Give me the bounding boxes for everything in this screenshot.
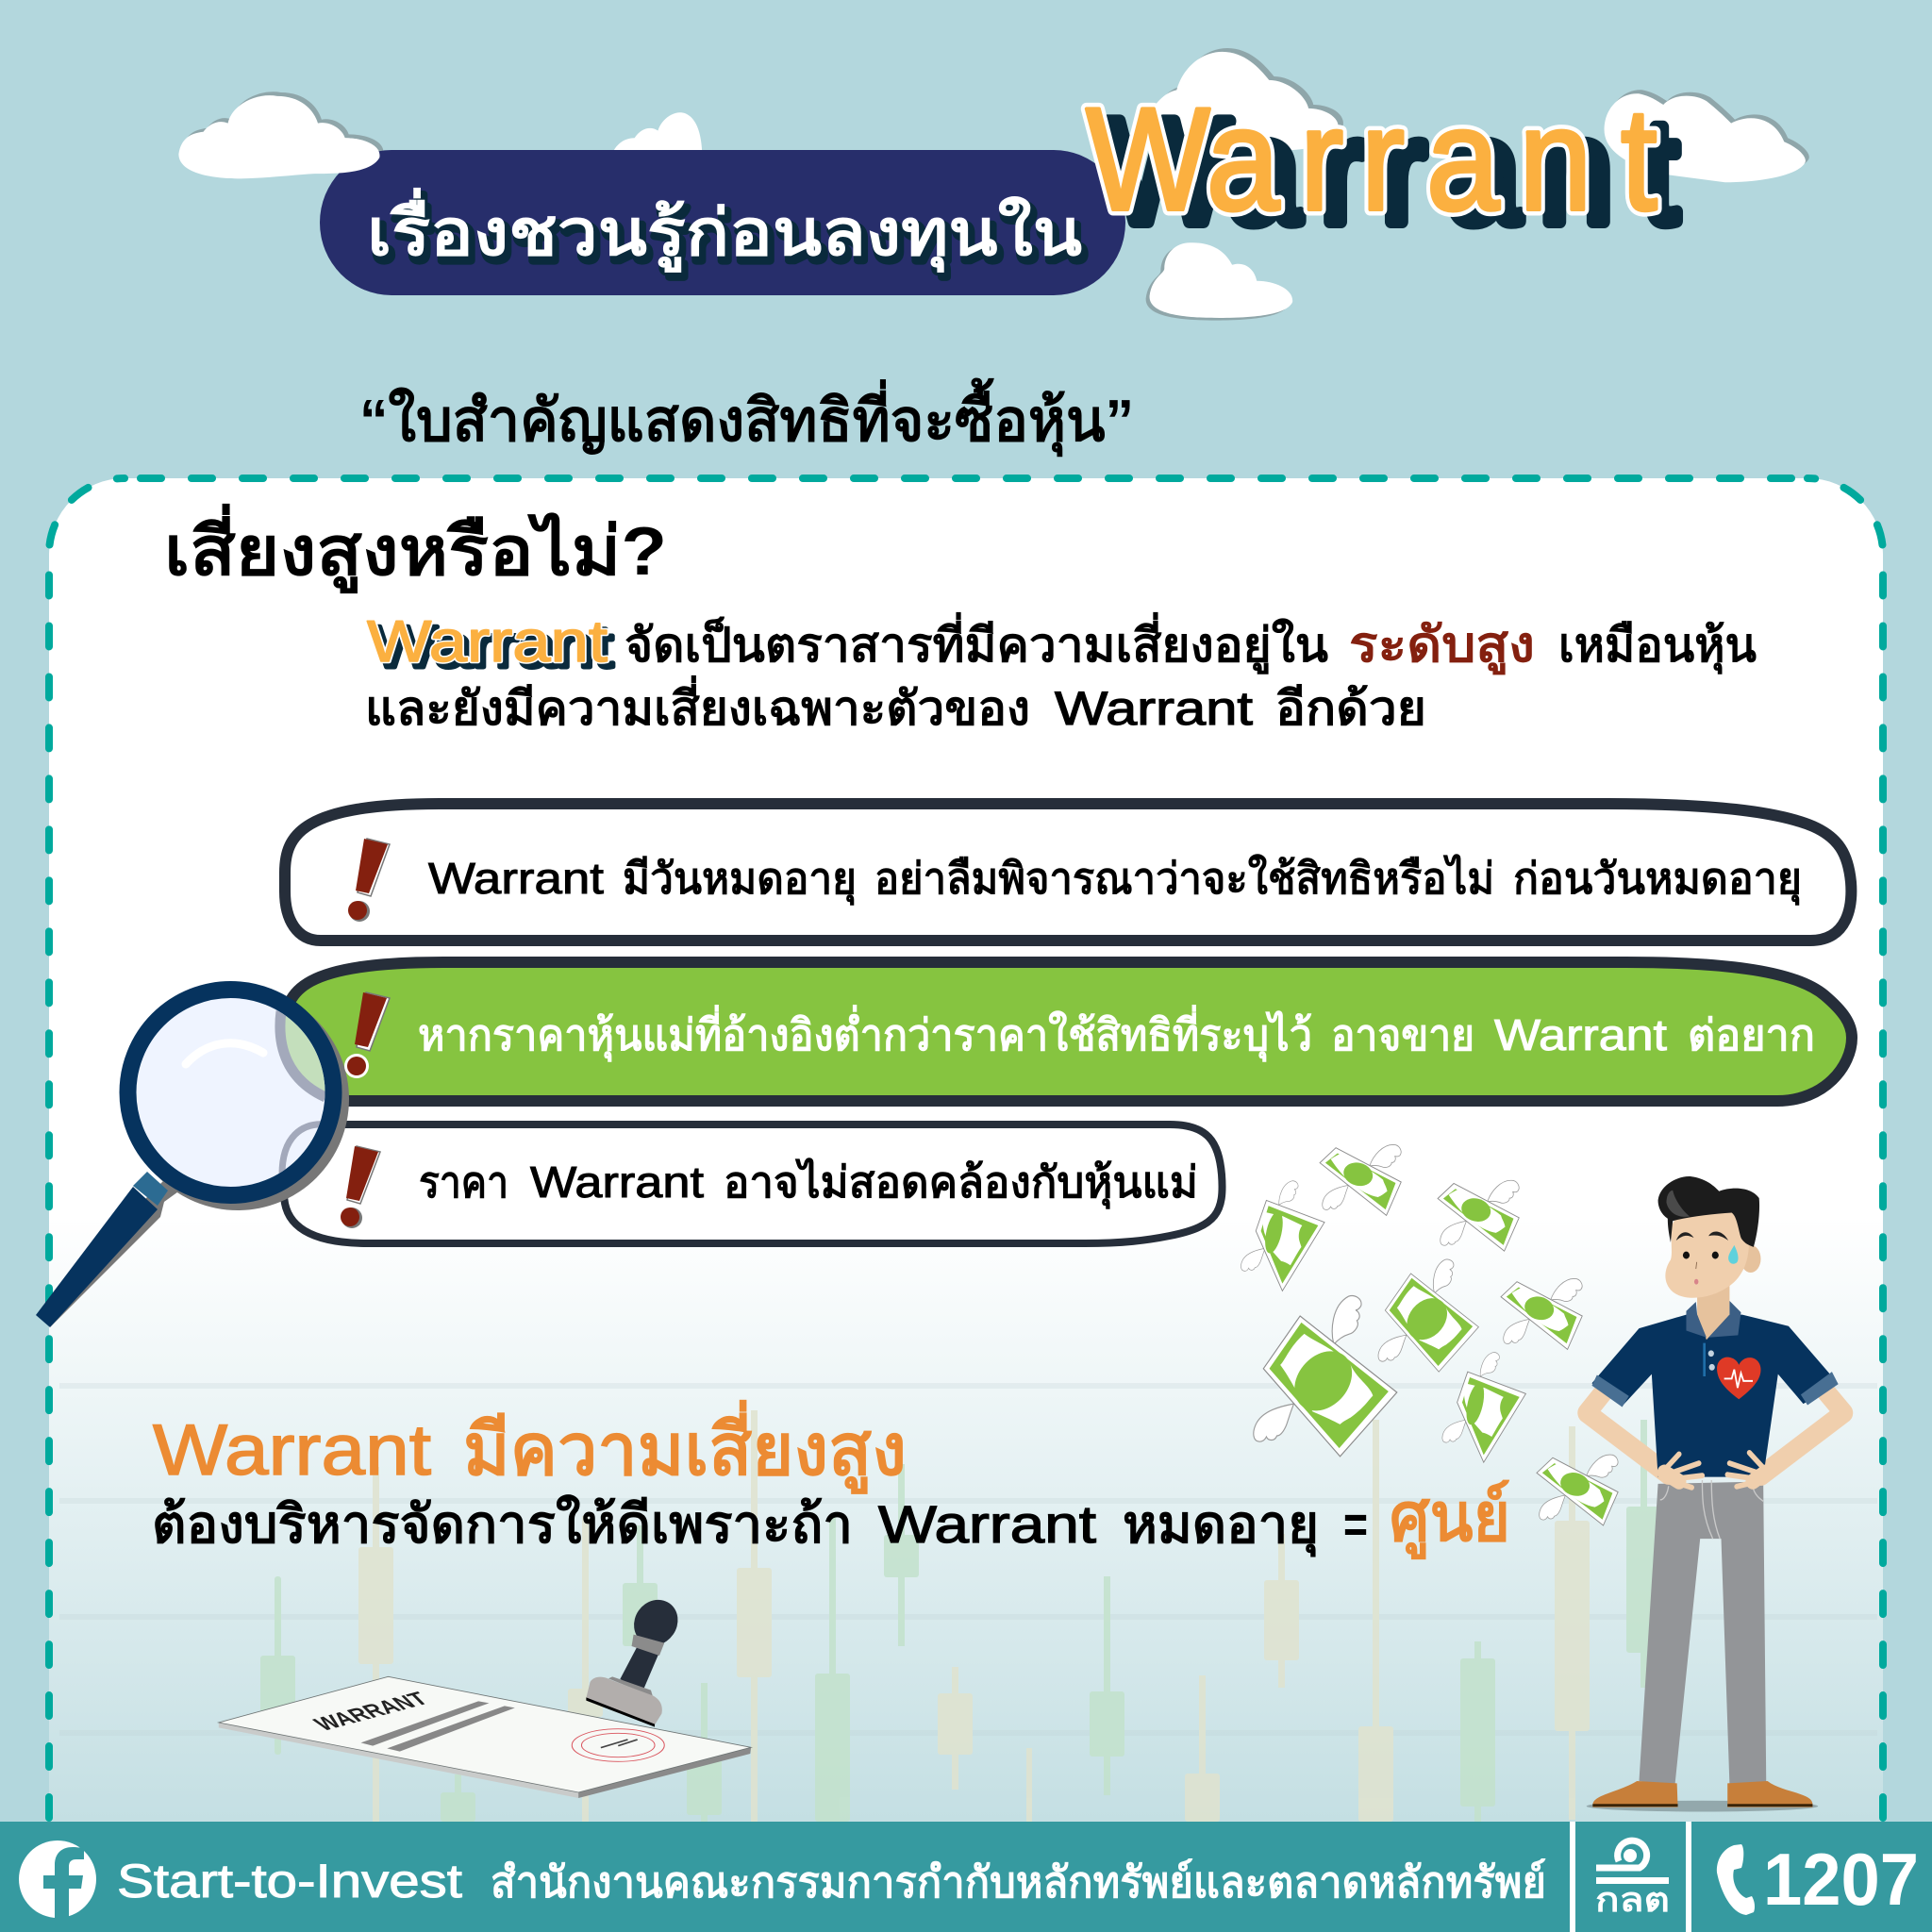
- candlestick background: [59, 1383, 1877, 1822]
- bill 2: [1378, 1259, 1478, 1372]
- icon: exclamation 2: [344, 992, 390, 1078]
- paragraph: line 2: และยังมีความเสี่ยงเฉพาะตัวของ: [365, 675, 1030, 735]
- heading: Warrant high risk: มีความเสี่ยงสูง: [463, 1399, 907, 1494]
- hands: [1664, 1453, 1765, 1488]
- trousers: [1639, 1481, 1766, 1786]
- cloud left overlap on pill: [295, 138, 380, 174]
- cloud: small behind pill: [610, 112, 702, 160]
- ground shadow: [1587, 1801, 1818, 1811]
- heart logo: [1717, 1357, 1761, 1399]
- panel: [49, 478, 1883, 1822]
- pill 3 text: Warrant: [530, 1158, 704, 1207]
- paragraph: line 2: อีกด้วย: [1275, 682, 1426, 735]
- pill 2 text: [418, 1005, 1815, 1062]
- title: pill text: [367, 187, 1086, 279]
- cloud: lower: [1146, 242, 1292, 321]
- heading: Warrant high risk: [153, 1399, 907, 1494]
- paragraph: line 2: [365, 675, 1426, 735]
- pill 1 text: [428, 853, 1802, 906]
- stamp: [586, 1596, 683, 1727]
- title: Warrant: Warrant: [1086, 78, 1657, 242]
- pill 3 text: อาจไม่สอดคล้องกับหุ้นแม่: [724, 1158, 1198, 1209]
- pill 1: [285, 804, 1851, 941]
- head: [1658, 1176, 1760, 1298]
- cloud: left: [178, 92, 383, 178]
- title pill: [320, 150, 1125, 295]
- paragraph: high level: ระดับสูง: [1349, 618, 1535, 675]
- cloud: behind Warrant: [1146, 48, 1343, 154]
- bill 7: [1241, 1178, 1324, 1291]
- pill 1 text: Warrant: [428, 854, 604, 903]
- hotline number: 1207: [1763, 1838, 1919, 1921]
- icon: exclamation 3: [341, 1146, 380, 1228]
- text: manage well: [152, 1493, 1368, 1557]
- document: WARRANT: [308, 1689, 434, 1735]
- title: Warrant: Warrant: [1107, 91, 1678, 254]
- cloud: right: [1605, 90, 1809, 182]
- icon: phone: [1717, 1844, 1755, 1915]
- collar: [1686, 1301, 1741, 1338]
- sleeve cuffs: [1591, 1372, 1839, 1407]
- text: manage well: ต้องบริหารจัดการให้ดีเพราะถ้า: [152, 1493, 853, 1554]
- paragraph: line 2: Warrant: [1055, 682, 1253, 735]
- footer text: organization: สำนักงานคณะกรรมการกำกับหลักทรัพย์และตลาดหลักทรัพย์: [491, 1857, 1546, 1907]
- subtitle quote: “ใบสำคัญแสดงสิทธิที่จะซื้อหุ้น”: [359, 377, 1134, 457]
- shoes: [1592, 1781, 1812, 1807]
- text: manage well: Warrant: [878, 1494, 1097, 1554]
- dashed border: [49, 478, 1883, 1822]
- footer bar: [0, 1822, 1932, 1932]
- hair: [1658, 1176, 1759, 1247]
- bill 5: [1438, 1174, 1522, 1251]
- icon: exclamation 1: [348, 839, 390, 922]
- neck: [1697, 1285, 1729, 1340]
- paragraph: line 1: จัดเป็นตราสารที่มีความเสี่ยงอยู่ใน: [625, 612, 1328, 675]
- text: zero: ศูนย์: [1390, 1479, 1510, 1560]
- arms: [1587, 1392, 1843, 1475]
- footer dividers: [1570, 1822, 1691, 1932]
- sweat drop: [1728, 1245, 1739, 1264]
- logo text: กลต: [1595, 1880, 1670, 1919]
- illustration: document and stamp: [219, 1596, 751, 1798]
- icon: facebook: [19, 1840, 96, 1918]
- paragraph: Warrant logo word: Warrant: [367, 609, 608, 675]
- pill 1 text: ก่อนวันหมดอายุ: [1513, 854, 1802, 906]
- pill 3 text: ราคา: [419, 1158, 508, 1207]
- clouds group: [178, 48, 1809, 321]
- bill large: [1254, 1296, 1397, 1457]
- pill 2 text: อาจขาย: [1331, 1010, 1474, 1059]
- bill 4: [1320, 1138, 1404, 1215]
- paragraph: like stock: เหมือนหุ้น: [1558, 619, 1757, 675]
- document: [219, 1676, 751, 1798]
- bill 6: [1537, 1447, 1620, 1525]
- bill 3: [1501, 1272, 1585, 1349]
- pill 2 text: ต่อยาก: [1688, 1010, 1815, 1059]
- pill 2 text: หากราคาหุ้นแม่ที่อ้างอิงต่ำกว่าราคาใช้สิทธิที่ระบุไว้: [418, 1005, 1312, 1062]
- heading: risk question: เสี่ยงสูงหรือไม่?: [164, 503, 667, 594]
- title: pill text: เรื่องชวนรู้ก่อนลงทุนใน: [371, 192, 1086, 279]
- logo: SEC: [1595, 1840, 1670, 1919]
- shirt: [1591, 1315, 1838, 1477]
- footer text: page name: Start-to-Invest: [117, 1855, 462, 1907]
- pill 2: [285, 962, 1852, 1101]
- paragraph: Warrant logo word: Warrant: [373, 615, 613, 680]
- title: pill text: เรื่องชวนรู้ก่อนลงทุนใน: [367, 187, 1082, 274]
- heading: Warrant high risk: Warrant: [153, 1410, 431, 1491]
- face: [1676, 1232, 1728, 1241]
- paragraph: Warrant logo word: Warrant: [367, 609, 608, 675]
- magnifier: [36, 988, 349, 1327]
- magnifier handle: [36, 1187, 158, 1327]
- title: Warrant: Warrant: [1086, 78, 1657, 242]
- text: manage well: =: [1343, 1494, 1368, 1554]
- buttons: [1705, 1343, 1715, 1376]
- pill 2 text: Warrant: [1494, 1010, 1667, 1059]
- pill 1 text: อย่าลืมพิจารณาว่าจะใช้สิทธิหรือไม่: [874, 853, 1494, 903]
- pill 3 text: [419, 1158, 1198, 1209]
- illustration: worried man: [1587, 1176, 1843, 1811]
- text: manage well: หมดอายุ: [1123, 1494, 1319, 1557]
- paragraph: [365, 609, 1757, 735]
- illustration: flying money: [1241, 1138, 1620, 1525]
- pill 1 text: มีวันหมดอายุ: [623, 854, 857, 906]
- bill 8: [1442, 1350, 1525, 1462]
- pill 3: [284, 1124, 1223, 1243]
